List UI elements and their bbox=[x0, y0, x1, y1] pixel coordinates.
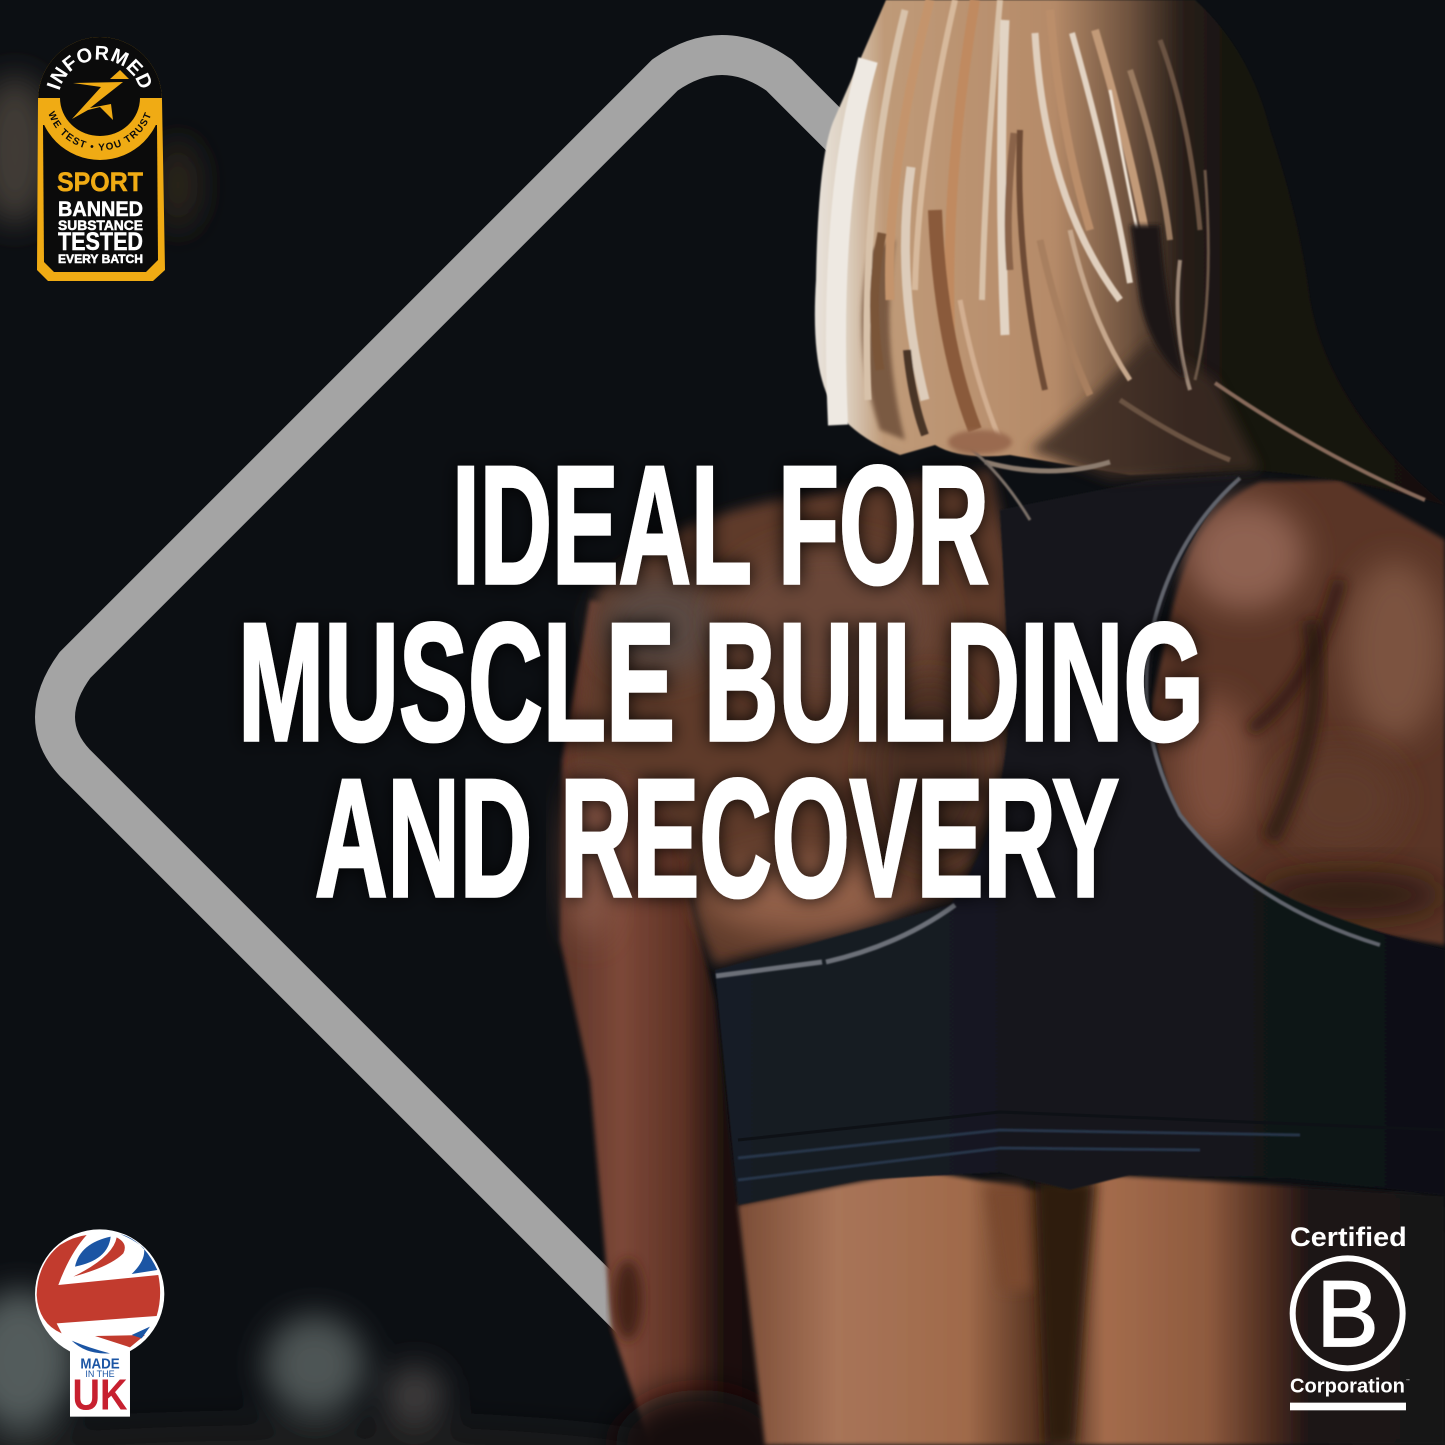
hair strands bbox=[836, 0, 1425, 520]
badge: Informed Sport bbox=[37, 37, 165, 281]
icon: B in circle bbox=[1293, 1258, 1403, 1368]
left arm bbox=[560, 600, 765, 1445]
title line 1: IDEAL FOR bbox=[452, 431, 989, 619]
bra hem bbox=[738, 1112, 1445, 1140]
right shoulder and arm bbox=[1148, 480, 1445, 945]
hair mass bbox=[815, 0, 1445, 505]
dark hair section bbox=[1130, 225, 1185, 380]
decorative rounded diamond outline bbox=[55, 55, 860, 1328]
badge text: SUBSTANCE bbox=[58, 217, 143, 233]
badge: Made in the UK: UK bbox=[72, 1371, 127, 1419]
badge text: TESTED bbox=[58, 228, 143, 256]
UK label: MADE bbox=[80, 1357, 120, 1373]
athlete body bbox=[560, 0, 1445, 1445]
badge: Certified B Corporation bbox=[1290, 1222, 1410, 1410]
badge: Made in the UK bbox=[35, 1229, 164, 1419]
badge text: SPORT bbox=[57, 167, 143, 197]
title bbox=[238, 431, 1204, 932]
forearm fade bbox=[615, 1390, 785, 1445]
neck bbox=[948, 430, 1012, 454]
icon: union flag globe bbox=[37, 1234, 160, 1353]
badge arc text: INFORMED bbox=[46, 46, 151, 90]
badge text bbox=[57, 167, 143, 266]
hair lower shadow bbox=[1030, 340, 1260, 480]
badge: Certified B Corporation: Certified bbox=[1290, 1222, 1407, 1252]
badge: Certified B Corporation: Corporation bbox=[1290, 1376, 1405, 1398]
bra trim bbox=[716, 905, 955, 976]
icon: B in circle: B bbox=[1317, 1262, 1379, 1366]
badge: Made in the UK: IN THE bbox=[85, 1369, 115, 1379]
icon: star runner bbox=[72, 70, 129, 120]
badge text: EVERY BATCH bbox=[58, 252, 143, 266]
left shoulder and upper back bbox=[575, 470, 1010, 965]
badge text: BANNED bbox=[58, 198, 143, 221]
lower back bbox=[738, 1170, 1065, 1445]
badge: Informed Sport: WE TEST • YOU TRUST bbox=[48, 110, 150, 150]
sports bra bbox=[715, 475, 1445, 1205]
spine shadow bbox=[1035, 1180, 1095, 1445]
badge: Certified B Corporation: ™ bbox=[1406, 1378, 1410, 1382]
